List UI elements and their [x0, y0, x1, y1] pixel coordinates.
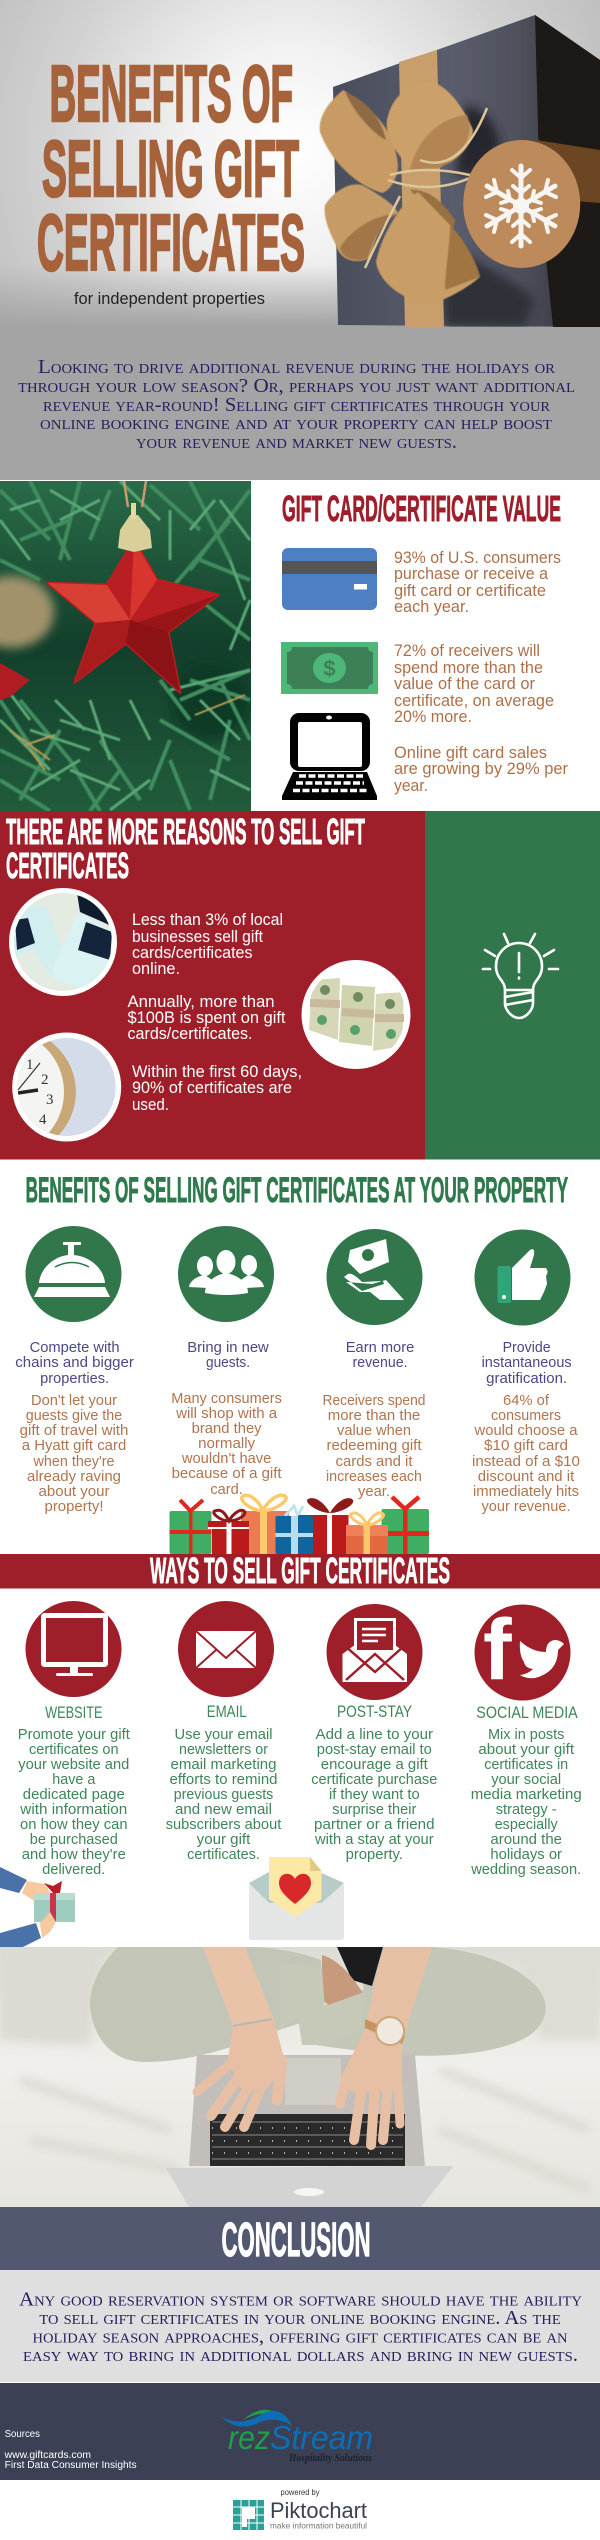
benefit 4 text: $10 gift card	[484, 1437, 568, 1454]
sources	[4, 2429, 137, 2471]
way 4: social media: about your gift	[478, 1741, 575, 1758]
intro text: through your low season? Or, perhaps you just want additional	[18, 375, 575, 397]
intro text: Looking to drive additional revenue during the holidays or	[38, 356, 556, 378]
stat: 93%: gift card or certificate	[394, 582, 546, 600]
stat: 29%: year.	[394, 777, 428, 795]
panel: benefits	[15, 1171, 580, 1515]
photo: woman typing on laptop	[0, 1947, 600, 2207]
way 2: email: subscribers about	[166, 1816, 282, 1833]
piktochart credit: make information beautiful	[270, 2522, 367, 2530]
benefit 2 text: will shop with a	[175, 1405, 278, 1422]
benefit 2 text	[171, 1339, 282, 1498]
way 3: post-stay: with a stay at your	[314, 1831, 434, 1848]
icon: gift box with bow	[320, 15, 600, 327]
photo: money stacks circle	[302, 960, 410, 1069]
panel: intro	[0, 327, 600, 480]
way 4: social media: Mix in posts	[488, 1726, 564, 1743]
photo: clock circle: 2	[41, 1072, 48, 1088]
text: $100B: cards/certificates.	[128, 1025, 252, 1043]
panel: conclusion text: easy way to bring in additional dollars and bring in new guests.	[23, 2344, 578, 2366]
way 3: post-stay: surprise their	[332, 1801, 416, 1818]
benefit 3 text: more than the	[328, 1407, 420, 1424]
panel: gift card value	[281, 488, 569, 800]
panel: conclusion text: to sell gift certificates in your online booking engine. As the	[39, 2307, 561, 2329]
title	[37, 49, 305, 287]
benefit 2 text: wouldn't have	[181, 1450, 271, 1467]
way 4: social media: SOCIAL MEDIA	[476, 1703, 578, 1722]
benefit 1 text: a Hyatt gift card	[22, 1437, 126, 1454]
benefit 3 text: Earn more	[346, 1339, 414, 1356]
benefit 4 text: discount and it	[478, 1468, 575, 1485]
text: $100B: $100B is spent on gift	[128, 1009, 286, 1027]
stat: 93%: each year.	[394, 598, 469, 616]
way 2: email: efforts to remind	[170, 1771, 278, 1788]
intro text: revenue year-round! Selling gift certificates through your	[43, 394, 551, 416]
benefit 4 text: gratification.	[486, 1370, 567, 1387]
text: less than 3%	[132, 911, 283, 978]
way 1: website: Promote your gift	[18, 1726, 131, 1743]
way 4: social media: media marketing	[471, 1786, 582, 1803]
way 2: email	[166, 1702, 282, 1863]
icon: thumbs up	[474, 1230, 570, 1326]
icon: piktochart logo	[233, 2500, 264, 2530]
sources: Sources	[5, 2429, 40, 2440]
panel: header: BENEFITS OF	[50, 49, 293, 138]
benefit 1 text: guests give the	[26, 1407, 122, 1424]
way 4: social media: strategy -	[496, 1801, 557, 1818]
way 2: email: EMAIL	[207, 1702, 247, 1721]
way 1: website: and how they're	[22, 1846, 126, 1863]
icon: monitor	[26, 1601, 122, 1697]
icon: group of people	[178, 1226, 274, 1322]
way 3: post-stay: if they want to	[329, 1786, 420, 1803]
benefit 4 text: instead of a $10	[472, 1453, 580, 1470]
photo: clock circle	[12, 1032, 122, 1142]
icon: facebook and twitter: f	[483, 1602, 512, 1698]
text: $100B	[128, 993, 286, 1043]
benefit 1 text: gift of travel with	[20, 1422, 128, 1439]
text: 60 days: Within the first 60 days,	[132, 1063, 302, 1081]
way 2: email: Use your email	[174, 1726, 272, 1743]
benefit 2 text: guests.	[206, 1354, 250, 1371]
way 1: website: your website and	[18, 1756, 129, 1773]
way 3: post-stay: property.	[346, 1846, 403, 1863]
logo: rezStream: rez	[228, 2419, 270, 2456]
logo: rezStream: Hospitality Solutions	[288, 2453, 372, 2464]
icon: envelope	[178, 1601, 274, 1697]
way 2: email: newsletters or	[179, 1741, 268, 1758]
icon: snowflake	[486, 166, 556, 246]
way 1: website: have a	[52, 1771, 96, 1788]
icon: dollar bill	[281, 642, 378, 694]
icon: laptop	[282, 713, 377, 800]
panel: conclusion text: Any good reservation system or software should have the ability	[19, 2288, 582, 2310]
way 1: website: dedicated page	[23, 1786, 125, 1803]
benefit 1 text	[15, 1339, 134, 1515]
heading: CERTIFICATES	[6, 845, 129, 886]
way 2: email: your gift	[197, 1831, 251, 1848]
benefit 1 text: about your	[38, 1483, 110, 1500]
panel: star ornament photo	[0, 481, 251, 811]
benefit 2 text: Bring in new	[187, 1339, 269, 1356]
way 4: social media: certificates in	[484, 1756, 568, 1773]
benefit 2 text: brand they	[192, 1420, 262, 1437]
stat: 72%: certificate, on average	[394, 692, 554, 710]
benefit 1 text: already raving	[27, 1468, 121, 1485]
way 2: email: certificates.	[187, 1846, 260, 1863]
benefit 2 text: normally	[198, 1435, 256, 1452]
photo: clock circle: 3	[46, 1092, 54, 1108]
benefit 4 text: Provide	[503, 1339, 551, 1356]
stat: 93%: purchase or receive a	[394, 565, 549, 583]
text: less than 3%: Less than 3% of local	[132, 911, 283, 929]
stat: 72%: value of the card or	[394, 675, 536, 693]
way 4: social media: wedding season.	[470, 1861, 581, 1878]
benefit 2 text: Many consumers	[171, 1390, 282, 1407]
way 2: email: email marketing	[170, 1756, 276, 1773]
way 3: post-stay: partner or a friend	[314, 1816, 435, 1833]
illustration: envelope with heart letter	[249, 1857, 344, 1940]
stat: 29%	[394, 744, 569, 795]
text: 60 days: used.	[132, 1096, 169, 1114]
way 4: social media: holidays or	[490, 1846, 562, 1863]
way 3: post-stay: POST-STAY	[337, 1702, 412, 1721]
photo: laptops circle	[9, 888, 120, 1000]
benefit 4 text: immediately hits	[473, 1483, 579, 1500]
panel: header: SELLING GIFT	[42, 124, 299, 213]
benefit 4 text: would choose a	[474, 1422, 578, 1439]
benefit 3 text: increases each	[326, 1468, 422, 1485]
benefit 2 text: because of a gift	[172, 1465, 282, 1482]
stat: 29%: Online gift card sales	[394, 744, 547, 762]
icon: money in hand	[326, 1229, 422, 1325]
text: $100B: Annually, more than	[128, 993, 274, 1011]
subtitle: for independent properties	[74, 289, 265, 308]
way 4: social media: your social	[491, 1771, 561, 1788]
panel: more reasons	[0, 811, 425, 1160]
way 4: social media: especially	[495, 1816, 558, 1833]
icon: red star	[48, 481, 218, 692]
panel: lightbulb	[425, 811, 600, 1160]
logo: rezStream	[220, 2410, 373, 2464]
panel: header	[0, 0, 600, 327]
benefit 1 text: Compete with	[30, 1339, 120, 1356]
stat: 72%	[394, 642, 554, 726]
benefit 1 text: when they're	[33, 1453, 115, 1470]
benefit 3 text: revenue.	[352, 1354, 408, 1371]
benefit 2 text: card.	[210, 1481, 243, 1498]
benefit 1 text: Don't let your	[31, 1392, 117, 1409]
icon: lightbulb	[483, 934, 558, 1018]
benefit 4 text: your revenue.	[482, 1498, 570, 1515]
way 4: social media: around the	[490, 1831, 562, 1848]
benefit 3 text: Receivers spend	[322, 1392, 426, 1409]
benefit 4 text: consumers	[491, 1407, 561, 1424]
way 4: social media	[470, 1703, 582, 1878]
photo: clock circle: 4	[39, 1112, 47, 1128]
benefit 1 text: property!	[44, 1498, 104, 1515]
text: less than 3%: businesses sell gift	[132, 928, 263, 946]
panel: header: CERTIFICATES	[37, 198, 305, 287]
stat: 72%: spend more than the	[394, 659, 543, 677]
way 3: post-stay: Add a line to your	[316, 1726, 433, 1743]
benefit 3 text: redeeming gift	[326, 1437, 422, 1454]
text: 60 days	[132, 1063, 302, 1114]
piktochart credit: Piktochart	[270, 2498, 367, 2523]
way 1: website: certificates on	[29, 1741, 119, 1758]
way 1: website: on how they can	[20, 1816, 128, 1833]
stat: 93%: 93% of U.S. consumers	[394, 549, 561, 567]
benefit 4 text: 64% of	[503, 1392, 550, 1409]
benefit 3 text: year.	[358, 1483, 390, 1500]
sources: www.giftcards.com	[4, 2450, 91, 2461]
stat: 29%: are growing by 29% per	[394, 760, 569, 778]
benefit 4 text: instantaneous	[482, 1354, 572, 1371]
intro text: online booking engine and at your property can help boost	[40, 412, 552, 434]
panel: conclusion text	[0, 2270, 600, 2382]
way 2: email: previous guests	[174, 1786, 273, 1803]
benefit 1 text: properties.	[40, 1370, 109, 1387]
icon: open envelope with letter	[326, 1604, 422, 1700]
way 1: website: be purchased	[30, 1831, 118, 1848]
logo: rezStream: Stream	[270, 2419, 373, 2456]
stat: 72%: 20% more.	[394, 708, 472, 726]
icon: concierge bell	[26, 1226, 122, 1322]
piktochart credit: powered by	[280, 2488, 320, 2497]
piktochart credit	[233, 2488, 367, 2530]
text: less than 3%: cards/certificates	[132, 944, 252, 962]
way 1: website: delivered.	[42, 1861, 105, 1878]
text: 60 days: 90% of certificates are	[132, 1079, 292, 1097]
way 3: post-stay	[311, 1702, 437, 1863]
panel: conclusion text: holiday season approaches, offering gift certificates can be an	[32, 2326, 568, 2348]
benefit 3 text: value when	[337, 1422, 411, 1439]
way 1: website	[18, 1703, 131, 1878]
text: less than 3%: online.	[132, 960, 180, 978]
icon: facebook and twitter	[474, 1602, 570, 1700]
intro text: your revenue and market new guests.	[136, 431, 457, 453]
panel: footer	[0, 2383, 600, 2480]
panel: conclusion heading: CONCLUSION	[222, 2214, 370, 2267]
icon: dollar bill: $	[323, 656, 336, 681]
stat: 93%	[394, 549, 561, 616]
way 1: website: with information	[19, 1801, 127, 1818]
way 3: post-stay: post-stay email to	[317, 1741, 432, 1758]
icon: credit card	[282, 548, 377, 610]
panel: ways to sell	[0, 1550, 600, 1878]
benefit 4 text	[472, 1339, 580, 1515]
way 3: post-stay: certificate purchase	[311, 1771, 437, 1788]
heading	[6, 811, 365, 886]
illustration: row of gift boxes	[170, 1495, 429, 1554]
way 1: website: WEBSITE	[45, 1703, 102, 1722]
sources: First Data Consumer Insights	[5, 2460, 137, 2471]
photo: clock circle: 1	[26, 1057, 34, 1073]
benefit 3 text	[322, 1339, 426, 1500]
benefit 1 text: chains and bigger	[15, 1354, 134, 1371]
way 3: post-stay: encourage a gift	[321, 1756, 429, 1773]
illustration: hands giving gift	[0, 1867, 75, 1947]
stat: 72%: 72% of receivers will	[394, 642, 540, 660]
intro text	[18, 356, 575, 453]
panel: conclusion heading	[0, 2207, 600, 2270]
benefit 3 text: cards and it	[336, 1453, 413, 1470]
way 2: email: and new email	[175, 1801, 272, 1818]
